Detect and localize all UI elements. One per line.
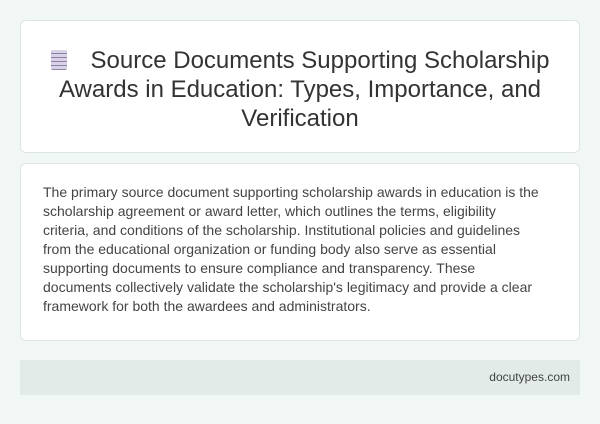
icon: document xyxy=(51,50,67,70)
panel: title xyxy=(20,20,580,153)
heading: Source Documents Supporting Scholarship Awards in Education: Types, Importance, and Verification xyxy=(59,47,549,132)
footer text: docutypes.com xyxy=(489,370,570,384)
text block: from the educational organization or funding body also serve as essential xyxy=(43,241,496,257)
text block: supporting documents to ensure compliance and transparency. These xyxy=(43,260,475,276)
panel: description xyxy=(20,163,580,341)
text block: criteria, and conditions of the scholarship. Institutional policies and guidelines xyxy=(43,222,520,238)
text block: The primary source document supporting scholarship awards in education is the xyxy=(43,184,539,200)
text block: scholarship agreement or award letter, which outlines the terms, eligibility xyxy=(43,203,496,219)
text block: documents collectively validate the scholarship's legitimacy and provide a clear xyxy=(43,279,532,295)
text block xyxy=(43,184,539,314)
text block: framework for both the awardees and administrators. xyxy=(43,298,371,314)
footer xyxy=(20,360,580,395)
